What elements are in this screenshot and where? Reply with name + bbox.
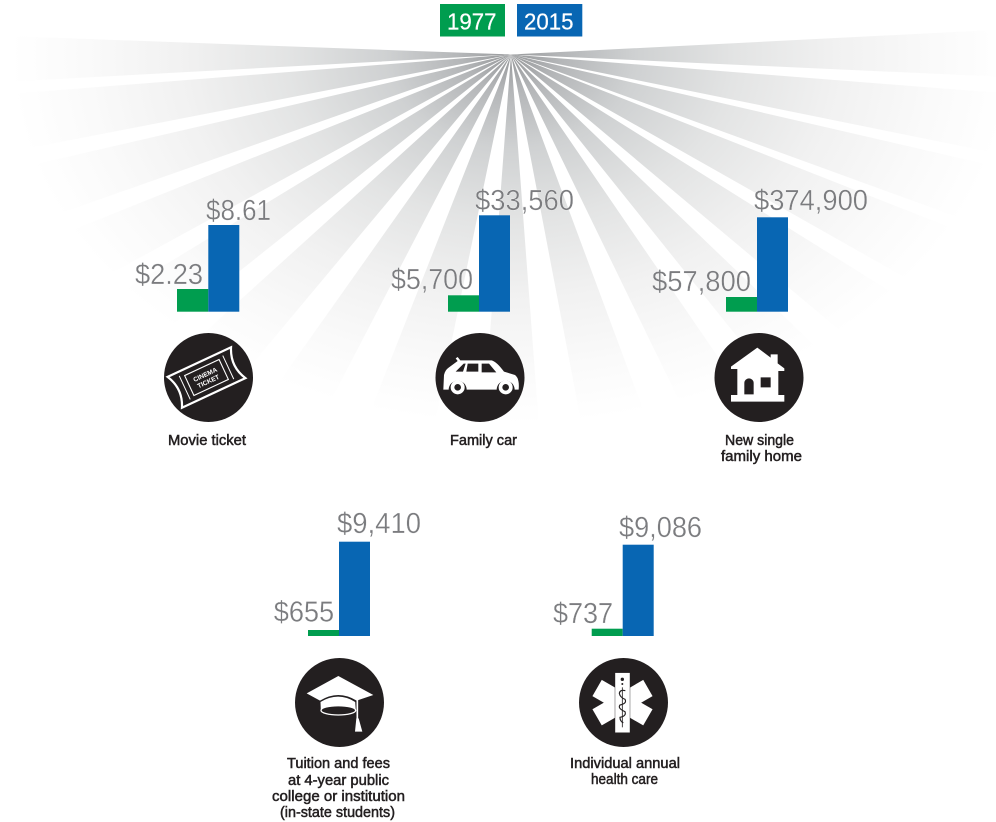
icon: cinema ticket: TICKET — [196, 374, 221, 390]
bar chart: new home: $57,800 — [652, 266, 751, 298]
label: new single family home: family home — [721, 449, 802, 465]
label: family car: Family car — [450, 433, 517, 449]
label: tuition and fees: at 4-year public — [288, 773, 389, 789]
sunburst background rays — [120, 35, 902, 344]
bar chart: movie ticket: $2.23 — [135, 259, 203, 291]
bar chart: family car: $5,700 — [391, 264, 473, 296]
panel: movie ticket — [135, 195, 271, 449]
bar chart: movie ticket: $8.61 — [206, 195, 271, 227]
icon: cinema ticket: CINEMA — [192, 367, 219, 384]
label: movie ticket: Movie ticket — [168, 433, 246, 449]
bar chart: health care: $9,086 — [619, 512, 702, 544]
bar chart: family car — [391, 185, 574, 312]
label: tuition and fees: college or institution — [272, 789, 405, 805]
panel: individual annual health care — [553, 512, 702, 788]
legend: 2015 — [517, 4, 582, 36]
bar chart: family car: $33,560 — [475, 185, 574, 217]
panel: new single family home — [652, 185, 868, 465]
panel: tuition and fees — [272, 508, 421, 821]
label: individual annual health care: Individual annual — [570, 756, 680, 772]
legend: 1977: 1977 — [447, 8, 496, 34]
label: tuition and fees — [272, 756, 405, 821]
label: individual annual health care: health care — [591, 772, 658, 788]
label: individual annual health care — [570, 756, 680, 788]
bar chart: new home: $374,900 — [754, 185, 868, 217]
bar chart: health care — [553, 512, 702, 636]
legend — [440, 4, 582, 36]
label: tuition and fees: Tuition and fees — [287, 756, 390, 772]
icon: star of life — [579, 658, 668, 747]
legend: 1977 — [440, 4, 505, 36]
icon: cinema ticket — [164, 333, 253, 422]
panel: family car — [391, 185, 574, 449]
bar chart: health care: $737 — [553, 598, 613, 630]
bar chart: tuition — [274, 508, 421, 636]
bar chart: new home — [652, 185, 868, 312]
bar chart: movie ticket — [135, 195, 271, 312]
icon: car — [436, 333, 524, 422]
legend: 2015: 2015 — [524, 8, 574, 34]
label: new single family home — [721, 433, 802, 465]
icon: graduation cap — [295, 658, 384, 747]
bar chart: tuition: $655 — [274, 597, 334, 629]
bar chart: tuition: $9,410 — [337, 508, 421, 540]
icon: house — [714, 333, 804, 422]
label: new single family home: New single — [725, 433, 794, 449]
label: tuition and fees: (in-state students) — [280, 805, 395, 821]
